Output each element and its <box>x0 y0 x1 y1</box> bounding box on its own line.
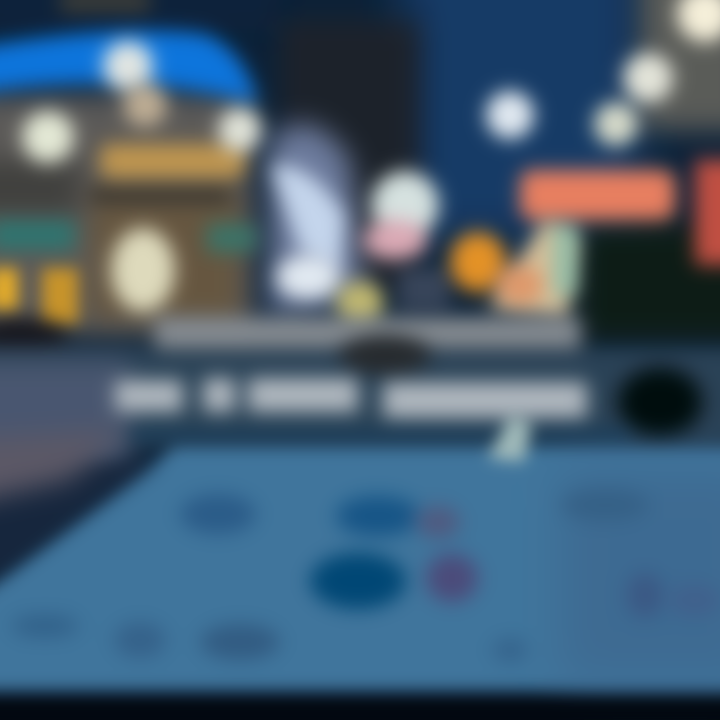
street band <box>0 348 720 470</box>
orange sign <box>100 144 245 178</box>
dark road wedge <box>0 460 160 590</box>
building: left storefront <box>0 30 262 358</box>
red-orange sign <box>520 170 675 220</box>
green awnings <box>0 220 75 250</box>
lights <box>22 111 74 163</box>
bottom dark band <box>0 697 720 720</box>
panel shading right <box>560 470 720 680</box>
heading line 1 <box>155 317 581 349</box>
heading: blurred title lines <box>115 317 630 442</box>
panel marks <box>180 494 256 534</box>
dark underline band <box>130 428 630 442</box>
lights <box>486 91 534 139</box>
panel: blue data sheet <box>0 430 720 690</box>
heading line 2 <box>115 378 587 418</box>
building: right storefront <box>486 0 720 340</box>
dark doorway <box>0 318 68 358</box>
pointer: light wedge over panel edge <box>488 416 532 462</box>
dark gaps in heading <box>339 335 431 375</box>
blue neon sign <box>0 30 258 104</box>
central illustration: abstract figure <box>270 124 578 325</box>
yellow windows <box>0 268 18 310</box>
